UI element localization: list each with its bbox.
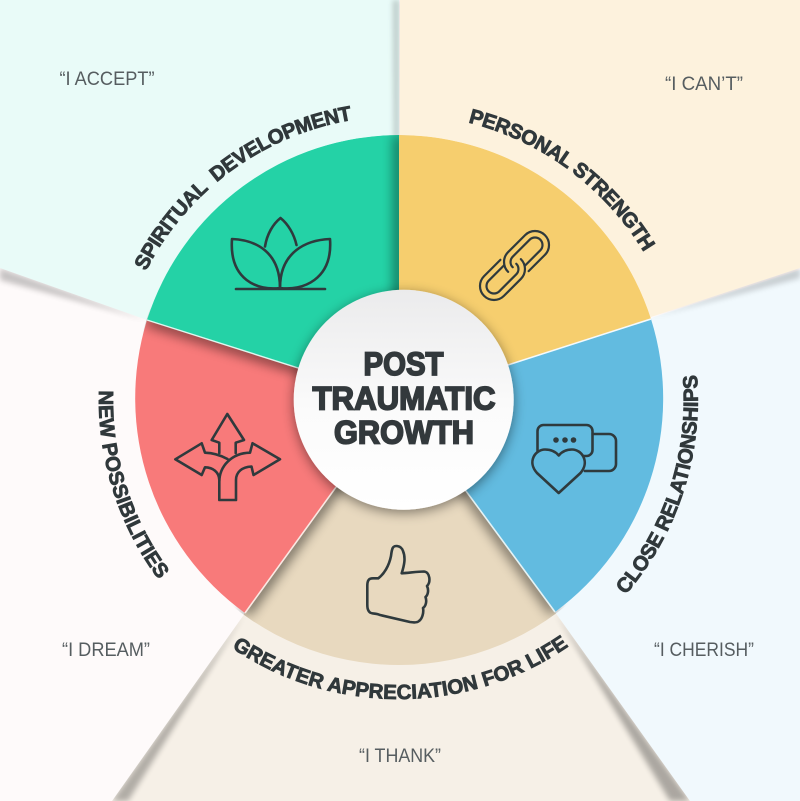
quote: I dream: “I DREAM” xyxy=(62,640,150,661)
title xyxy=(312,346,496,450)
segment: spiritual development xyxy=(147,135,399,368)
icon: chain xyxy=(474,225,555,306)
title: GROWTH xyxy=(334,414,474,450)
icon: crossroads arrows xyxy=(175,414,280,500)
quote: I accept: “I ACCEPT” xyxy=(60,69,154,90)
heading: personal strength: PERSONAL STRENGTH xyxy=(469,108,656,252)
wheel segments xyxy=(135,135,663,675)
quote: I thank: “I THANK” xyxy=(359,746,441,767)
panel: I accept xyxy=(0,0,399,400)
quote: I cherish: “I CHERISH” xyxy=(654,640,754,661)
segment: personal strength xyxy=(399,135,651,364)
heading: spiritual development: SPIRITUAL DEVELOPMENT xyxy=(135,106,350,270)
panel: I thank xyxy=(112,400,690,801)
segment: close relationships xyxy=(466,319,664,612)
icon: thumbs up xyxy=(367,546,429,622)
icon: lotus xyxy=(232,218,330,289)
segment: new possibilities xyxy=(135,320,336,613)
segment: greater appreciation xyxy=(244,488,556,665)
panel: I dream xyxy=(0,270,399,801)
panel: I can't xyxy=(399,0,800,400)
panel: I cherish xyxy=(399,270,800,801)
heading: greater appreciation for life: GREATER APPRECIATION FOR LIFE xyxy=(234,634,569,700)
title: TRAUMATIC xyxy=(312,380,496,416)
title: POST xyxy=(364,346,444,382)
icon: chat and heart xyxy=(532,425,616,493)
heading: new possibilities: NEW POSSIBILITIES xyxy=(98,391,168,578)
center circle xyxy=(294,290,514,510)
heading: close relationships: CLOSE RELATIONSHIPS xyxy=(617,375,698,592)
quote: I can't: “I CAN’T” xyxy=(665,74,743,95)
